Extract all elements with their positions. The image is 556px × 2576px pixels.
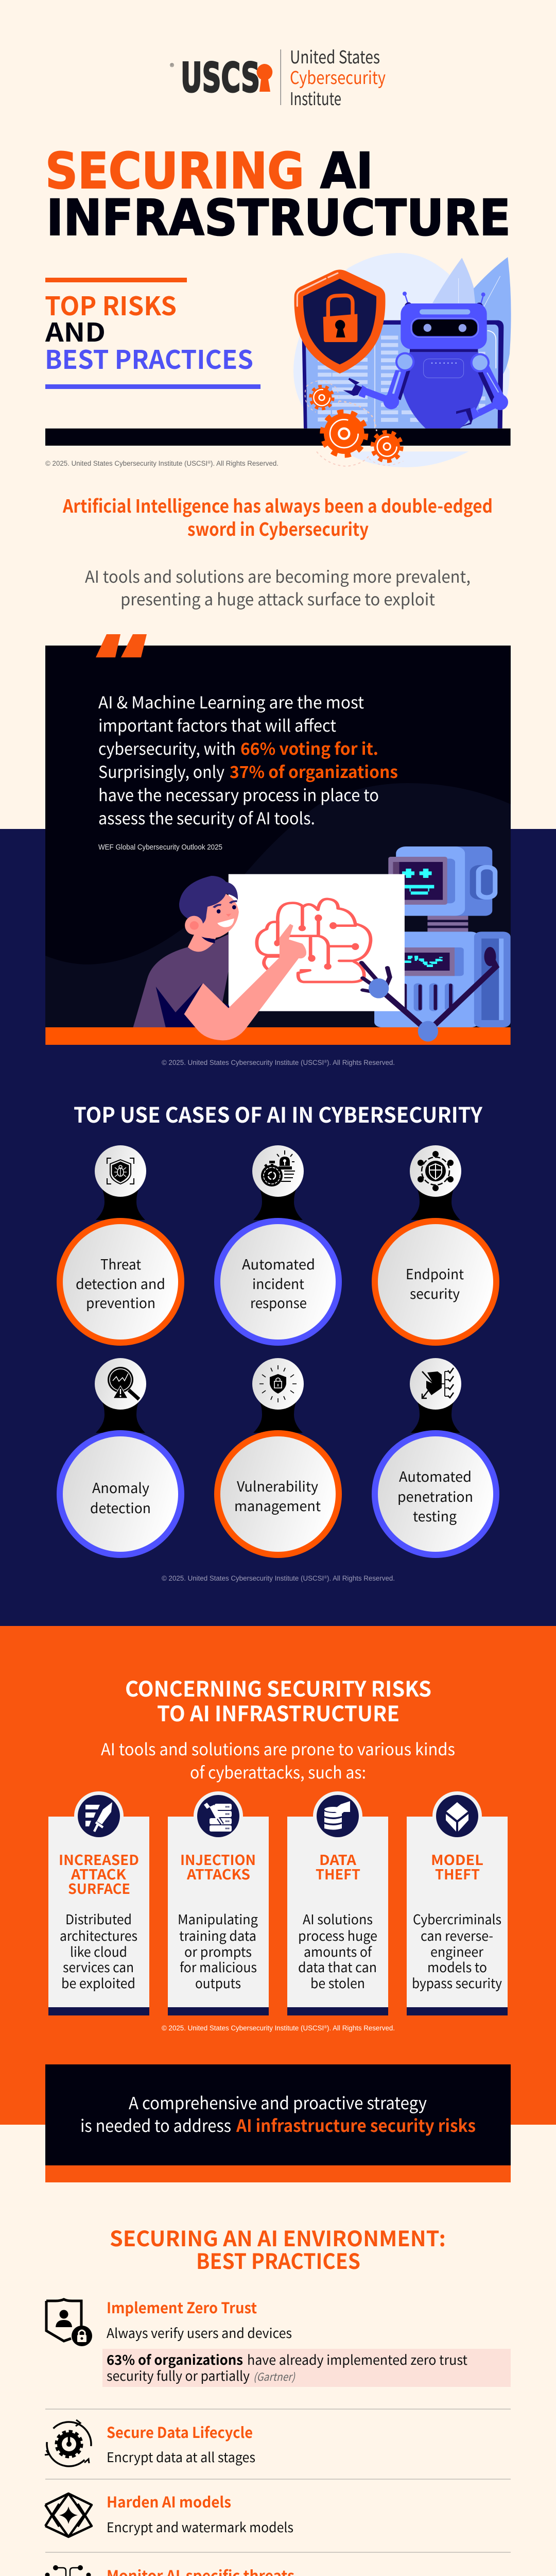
copyright: © 2025. United States Cybersecurity Institute (USCSI	[45, 460, 210, 467]
heading: best practices	[110, 2222, 446, 2275]
brain	[257, 899, 371, 982]
panel: model theft: models to	[427, 1957, 487, 1976]
copyright: © 2025. United States Cybersecurity Institute (USCSI	[162, 2024, 326, 2032]
illustration: person and robot with brain	[45, 846, 511, 1045]
panel: increased attack surface	[48, 1791, 149, 2015]
copyright: ). All Rights Reserved.	[327, 1574, 395, 1582]
orange bar	[45, 1027, 511, 1045]
heading: concerning security risks: TO AI INFRASTRUCTURE	[157, 1697, 399, 1727]
cream gap under bar	[287, 446, 511, 451]
panel: increased attack surface: SURFACE	[68, 1878, 130, 1898]
panel: data theft: DATA	[319, 1849, 357, 1869]
intro text: presenting a huge attack surface to exploit	[120, 587, 435, 611]
practice: harden AI models: Harden AI models	[107, 2490, 231, 2512]
heading: concerning security risks: CONCERNING SECURITY RISKS	[125, 1672, 431, 1703]
panel: data theft: be stolen	[310, 1973, 365, 1992]
panel: automated penetration testing: Automated	[399, 1466, 472, 1486]
icon: broken shield with checklist	[422, 1368, 454, 1398]
icon: shield user lock	[46, 2299, 92, 2346]
panel: increased attack surface: services can	[63, 1957, 134, 1976]
panel: anomaly detection: detection	[90, 1497, 151, 1517]
panel: threat detection and prevention	[57, 1145, 184, 1346]
panel: data theft: amounts of	[304, 1942, 372, 1961]
copyright: ®	[207, 460, 211, 465]
practice: monitor AI-specific threats	[45, 2564, 510, 2576]
panel: injection attacks: ATTACKS	[186, 1863, 250, 1884]
headline: double-edged sword: Artificial Intelligence has always been a double-edged	[62, 492, 493, 518]
practice: secure data lifecycle: Secure Data Lifecycle	[107, 2421, 253, 2443]
icon: network shield	[418, 1151, 454, 1191]
panel: model theft: engineer	[430, 1942, 484, 1961]
risks intro text	[101, 1737, 455, 1784]
panel: automated incident response: incident	[252, 1273, 304, 1293]
heading: best practices: SECURING AN AI ENVIRONMENT:	[110, 2222, 446, 2252]
practice: implement zero trust: Implement Zero Trust	[107, 2296, 257, 2318]
panel: threat detection and prevention: prevention	[86, 1292, 155, 1312]
practice: implement zero trust	[46, 2296, 511, 2387]
icon: sword and bars	[85, 1802, 112, 1832]
practice: harden AI models: Encrypt and watermark models	[107, 2517, 293, 2536]
icon: gear lifecycle	[38, 2413, 100, 2476]
panel: increased attack surface: INCREASED	[59, 1849, 139, 1869]
panel: injection attacks	[168, 1791, 269, 2015]
logo: Institute	[290, 85, 341, 110]
practice: secure data lifecycle: Encrypt data at all stages	[107, 2447, 255, 2466]
logo: Cybersecurity	[290, 64, 386, 89]
icon: server and syringe	[204, 1803, 232, 1832]
logo: United States	[290, 43, 380, 69]
copyright: © 2025. United States Cybersecurity Institute (USCSI	[162, 1059, 326, 1066]
callout: 63% stat: (Gartner)	[253, 2369, 296, 2384]
copyright: ®	[324, 1059, 327, 1064]
subtitle: BEST PRACTICES	[45, 340, 253, 377]
panel: model theft: MODEL	[431, 1849, 483, 1869]
panel: model theft: can reverse-	[421, 1926, 493, 1945]
panel: strategy callout: is needed to address	[80, 2112, 231, 2137]
callout: 63% stat: 63% of organizations	[107, 2350, 243, 2369]
panel: threat detection and prevention: Threat	[100, 1253, 141, 1274]
panel: endpoint security	[372, 1145, 499, 1346]
black bar	[45, 429, 511, 446]
panel: injection attacks: for malicious	[180, 1957, 257, 1976]
panel: model theft: Cybercriminals	[413, 1909, 501, 1928]
icon: database and hand	[324, 1801, 350, 1830]
panel: increased attack surface: be exploited	[61, 1973, 135, 1992]
panel: data theft: process huge	[298, 1926, 377, 1945]
quote text: important factors that will affect	[98, 713, 336, 737]
panel: injection attacks: INJECTION	[180, 1849, 256, 1869]
risks intro text: of cyberattacks, such as:	[190, 1760, 366, 1784]
copyright: ). All Rights Reserved.	[327, 2024, 395, 2032]
panel: strategy callout: A comprehensive and proactive strategy	[129, 2090, 427, 2114]
heading: concerning security risks	[125, 1672, 431, 1727]
practice: secure data lifecycle	[38, 2413, 255, 2476]
quote text: 66% voting for it.	[240, 736, 378, 760]
panel: injection attacks: or prompts	[184, 1942, 252, 1961]
panel: data theft: data that can	[298, 1957, 377, 1976]
quote text	[98, 690, 398, 829]
practice: implement zero trust: Always verify users and devices	[107, 2323, 292, 2342]
panel: data theft	[287, 1791, 388, 2015]
risks intro text: AI tools and solutions are prone to various kinds	[101, 1737, 455, 1760]
panel: automated incident response: Automated	[242, 1253, 315, 1274]
panel: model theft: THEFT	[435, 1863, 480, 1884]
panel: injection attacks: training data	[179, 1926, 256, 1945]
panel: increased attack surface: architectures	[60, 1926, 137, 1945]
panel: increased attack surface: Distributed	[65, 1909, 132, 1928]
quote text: cybersecurity, with	[98, 736, 236, 760]
icon: shield with bug	[107, 1158, 134, 1184]
quote text: assess the security of AI tools.	[98, 806, 315, 829]
main title: INFRASTRUCTURE	[46, 189, 511, 247]
panel: vulnerability management: Vulnerability	[237, 1476, 318, 1496]
panel: injection attacks: outputs	[195, 1973, 241, 1992]
subtitle: TOP RISKS	[45, 286, 177, 323]
source: WEF Global Cybersecurity Outlook 2025	[98, 843, 222, 852]
main title	[45, 142, 511, 247]
panel: data theft: AI solutions	[303, 1909, 373, 1928]
panel: automated penetration testing: penetration	[397, 1486, 473, 1506]
panel: increased attack surface: ATTACK	[71, 1863, 127, 1884]
icon: AI chip brain	[45, 2565, 91, 2576]
intro text: AI tools and solutions are becoming more prevalent,	[85, 564, 471, 588]
quote marks	[96, 634, 147, 657]
subtitle	[45, 278, 260, 389]
icon: watermark diamond	[45, 2494, 92, 2537]
callout: 63% stat: security fully or partially	[107, 2366, 250, 2385]
person	[133, 934, 233, 1027]
headline: double-edged sword: sword in Cybersecurity	[187, 515, 369, 541]
logo: ®	[170, 60, 174, 73]
heading: top use cases: TOP USE CASES OF AI IN CYBERSECURITY	[74, 1098, 483, 1129]
intro text	[85, 564, 471, 611]
logo: USCS	[181, 55, 260, 101]
icon: shield with lock and rays	[259, 1365, 297, 1402]
main title: SECURING	[45, 142, 304, 200]
panel: data theft: THEFT	[316, 1863, 360, 1884]
copyright: ). All Rights Reserved.	[327, 1059, 395, 1066]
icon: magnifier with warning	[108, 1367, 139, 1399]
copyright: ®	[324, 1575, 327, 1580]
copyright: ). All Rights Reserved.	[211, 460, 279, 467]
practice: harden AI models	[45, 2490, 293, 2537]
panel: increased attack surface: like cloud	[70, 1942, 127, 1961]
gears	[310, 386, 402, 461]
main title: AI	[320, 142, 373, 200]
white board	[229, 874, 405, 1011]
panel: automated penetration testing	[372, 1358, 499, 1558]
quote text: AI & Machine Learning are the most	[98, 690, 364, 714]
panel: anomaly detection: Anomaly	[92, 1477, 149, 1497]
quote text: have the necessary process in place to	[98, 783, 379, 806]
icon: stopwatch and siren	[261, 1150, 295, 1187]
panel: model theft	[407, 1791, 508, 2015]
subtitle: AND	[45, 312, 106, 349]
panel: strategy callout: AI infrastructure security risks	[236, 2112, 476, 2137]
icon: cube	[446, 1802, 468, 1832]
panel: automated penetration testing: testing	[413, 1505, 457, 1526]
robot	[343, 292, 508, 429]
copyright: © 2025. United States Cybersecurity Institute (USCSI	[162, 1574, 326, 1582]
panel: threat detection and prevention: detection and	[76, 1273, 165, 1293]
copyright: ®	[324, 2025, 327, 2029]
panel: vulnerability management: management	[234, 1495, 321, 1515]
panel: strategy callout	[45, 2064, 511, 2182]
logo	[170, 43, 386, 110]
heading: best practices: BEST PRACTICES	[196, 2244, 360, 2275]
dashed gear paths	[305, 381, 403, 466]
hero illustration: shield, robot and gears	[45, 253, 511, 467]
quote text: Surprisingly, only	[98, 759, 224, 783]
panel: automated incident response	[214, 1145, 342, 1346]
quote text: 37% of organizations	[230, 759, 398, 783]
shield with padlock	[294, 269, 386, 374]
panel: injection attacks: Manipulating	[178, 1909, 258, 1928]
panel: endpoint security: security	[410, 1283, 460, 1303]
headline: double-edged sword	[62, 492, 493, 541]
callout: 63% stat	[102, 2349, 511, 2387]
callout: 63% stat: have already implemented zero trust	[247, 2350, 467, 2369]
panel: anomaly detection	[57, 1358, 184, 1558]
panel: endpoint security: Endpoint	[406, 1263, 464, 1283]
robot arm	[361, 957, 496, 1031]
panel: vulnerability management	[214, 1358, 342, 1558]
panel: quote card	[45, 634, 511, 1045]
panel: model theft: bypass security	[412, 1973, 502, 1992]
panel: automated incident response: response	[250, 1292, 307, 1312]
